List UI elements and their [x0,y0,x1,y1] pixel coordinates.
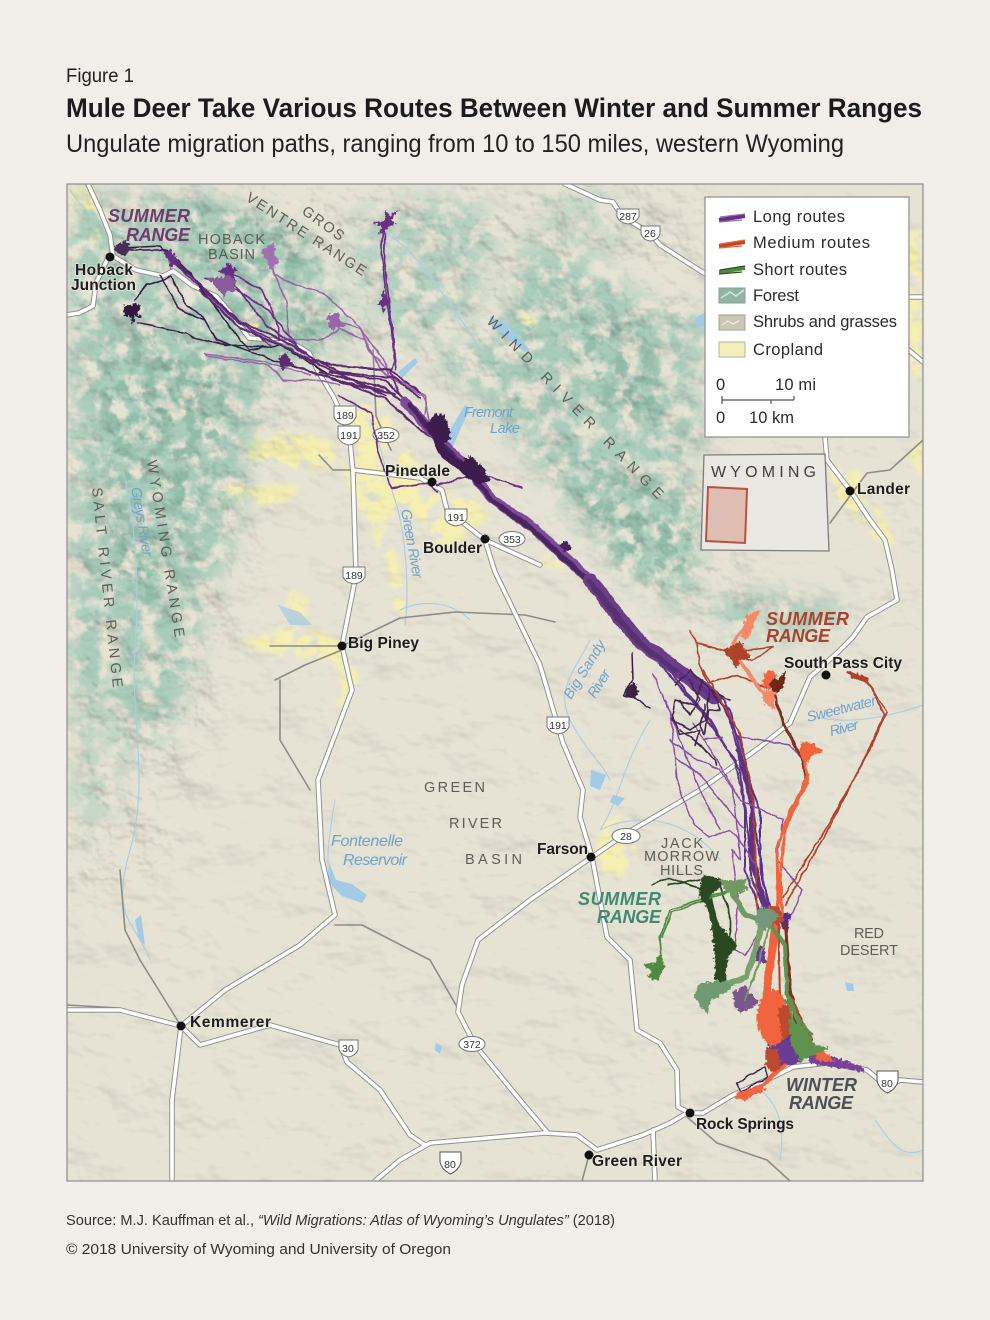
light purple branches [205,253,430,425]
long-route summer range [108,206,191,245]
city names: South Pass City [784,655,902,672]
city markers and names [71,252,910,1170]
Fontenelle Reservoir [329,862,367,903]
forest key [719,287,799,305]
range and basin names: HILLS [660,863,703,879]
I-80 east: 80 [881,1078,893,1090]
US 30 [339,1040,358,1057]
range and basin names: JACK [661,836,703,852]
brown-red strands [690,630,887,930]
I-80 west: 80 [444,1159,456,1171]
road shields [334,209,898,1174]
winter range outline [737,1067,768,1092]
denser forest [90,200,700,640]
study area [706,487,747,543]
range and basin names: GREEN [424,780,487,796]
range and basin names: WYOMING RANGE [143,459,187,642]
shrubs key: Shrubs and grasses [753,313,897,331]
winter range [786,1075,857,1113]
range and basin names: GROS [299,203,349,246]
darkest routes [122,246,650,708]
thin meander routes [653,673,803,955]
orange strands [775,760,808,925]
WY 28: 28 [620,831,632,843]
minor roads [67,350,923,1181]
US 191 Boulder: 191 [447,512,465,524]
medium-route summer range [766,609,849,646]
US 189 north: 189 [336,410,354,422]
lower orange bands [767,925,776,1030]
scale bar: 0 [716,376,725,394]
mid-green strands [660,887,737,965]
lower trunk band [590,580,715,698]
darkest green strands [652,878,730,945]
water names: River [828,717,861,740]
lower trunk core [590,582,675,670]
short-route summer range: RANGE [597,907,662,927]
long routes: purple [122,232,803,1092]
US 191 north: 191 [340,430,358,442]
terrain hillshade [67,184,923,1181]
US 191 Boulder [445,509,467,526]
lower strands [660,665,775,925]
range and basin names: BASIN [465,852,524,868]
WY 28 [612,828,640,844]
long-route summer range: RANGE [126,225,191,245]
short routes: green [652,878,812,1043]
water bodies [135,312,854,1054]
mountain relief [68,184,823,892]
wide band at Fremont [430,425,480,480]
range labels [108,206,857,1113]
city names: Rock Springs [696,1116,794,1133]
range and basin names: SALT RIVER RANGE [88,487,125,692]
water names: Fremont [464,405,514,421]
dark green band [705,880,722,980]
I-80 east [877,1071,898,1093]
water names: Green River [397,508,425,581]
US 189 south: 189 [345,570,363,582]
rivers [70,190,923,1160]
range and basin names: VENTRE RANGE [243,190,371,281]
range and basin names: DESERT [840,943,898,959]
US 287: 287 [619,211,637,223]
dark tangle [672,670,730,765]
medium-route summer range: RANGE [766,626,831,646]
US 30: 30 [342,1043,354,1055]
city names: Junction [71,277,136,294]
WY 352: 352 [377,430,395,442]
medium routes key: Medium routes [753,234,870,252]
salmon strand [733,625,772,700]
map base: shrubs and grasses [67,184,923,1181]
water names: Lake [490,421,520,437]
scale bar: 10 km [749,409,794,427]
copyright line: © 2018 University of Wyoming and University of Oregon [66,1242,451,1258]
state name: WYOMING [711,464,816,481]
upper lakes [490,316,530,352]
long-route summer range: SUMMER [108,206,190,226]
forest cover [67,184,850,840]
range and basin names: BASIN [208,247,255,263]
cropland [67,186,923,878]
state outline [701,454,829,551]
scale bar: 0 [716,409,725,427]
short-route summer range: SUMMER [578,889,661,909]
city names: Big Piney [348,635,419,652]
dark-red strand [773,690,807,783]
US 26: 26 [644,228,656,240]
inset locator: Wyoming [701,454,829,551]
lower thick strand [738,750,767,912]
US 189 south [343,567,365,584]
city names: Boulder [423,540,482,557]
short route endpoint clusters [643,874,829,1061]
scale bar: 10 mi [775,376,816,394]
US 287 [617,209,639,224]
WY 352 [373,428,399,442]
city names [71,262,910,1170]
sage-green bands [733,895,765,922]
range and basin names: RED [854,926,884,942]
map frame [67,184,923,1181]
medium routes: orange and red [690,625,887,1097]
legend [705,197,909,437]
cropland key [719,341,823,359]
WY 372 [459,1036,485,1052]
US 191 south [547,717,569,734]
legend box [705,197,909,437]
water names: Sweetwater [805,693,879,726]
city names: Kemmerer [190,1014,271,1031]
US 26 [641,226,660,241]
highways [66,184,923,1181]
range and basin names: HOBACK [198,232,265,248]
city names: Hoback [75,262,133,279]
medium route endpoint clusters [723,610,870,1101]
WY 353: 353 [503,534,521,546]
range and basin names: MORROW [644,849,719,865]
water names: Big Sandy [561,637,610,702]
figure label: Figure 1 [66,65,134,87]
upper strands [176,262,450,450]
trunk outer band [405,402,590,580]
US 189 north [334,406,356,425]
water names: River [585,666,615,701]
cropland key: Cropland [753,341,823,359]
highway casing [66,184,923,1181]
migration routes [115,208,887,1101]
scale bar [716,376,816,427]
subtitle: Ungulate migration paths, ranging from 10 to 150 miles, western Wyoming [66,130,844,158]
Fremont Lake [448,405,470,447]
title: Mule Deer Take Various Routes Between Winter and Summer Ranges [66,93,922,123]
long routes key: Long routes [753,208,845,226]
winter range: WINTER [786,1075,857,1095]
source line: Source: M.J. Kauffman et al., “Wild Migrations: Atlas of Wyoming’s Ungulates” (2018) [66,1213,615,1229]
city names: Pinedale [385,463,450,480]
forest key: Forest [753,287,799,305]
water names: Greys River [127,486,155,559]
water names: Reservoir [343,852,408,869]
highway centre [66,184,923,1181]
map panel [66,184,923,1181]
US 191 north [338,426,360,445]
US 191 south: 191 [549,720,567,732]
medium-route summer range: SUMMER [766,609,849,629]
water names [127,405,879,869]
Half Moon Lake [398,358,418,378]
long route endpoint clusters [115,208,864,1072]
winter range: RANGE [789,1093,854,1113]
short routes key: Short routes [753,261,847,279]
I-80 west [440,1152,461,1174]
range and basin names [88,190,898,959]
water names: Fontenelle [331,833,403,850]
range and basin names: RIVER [449,816,504,832]
city names: Green River [592,1153,682,1170]
medium purple branches [173,232,522,493]
trunk core [410,405,590,582]
city dots [106,252,854,1160]
short-route summer range [578,889,662,927]
geographic labels [88,190,898,959]
city names: Lander [857,481,910,498]
WY 372: 372 [463,1039,481,1051]
range and basin names: WIND RIVER RANGE [483,314,668,505]
city names: Farson [537,841,588,858]
WY 353 [499,532,525,546]
